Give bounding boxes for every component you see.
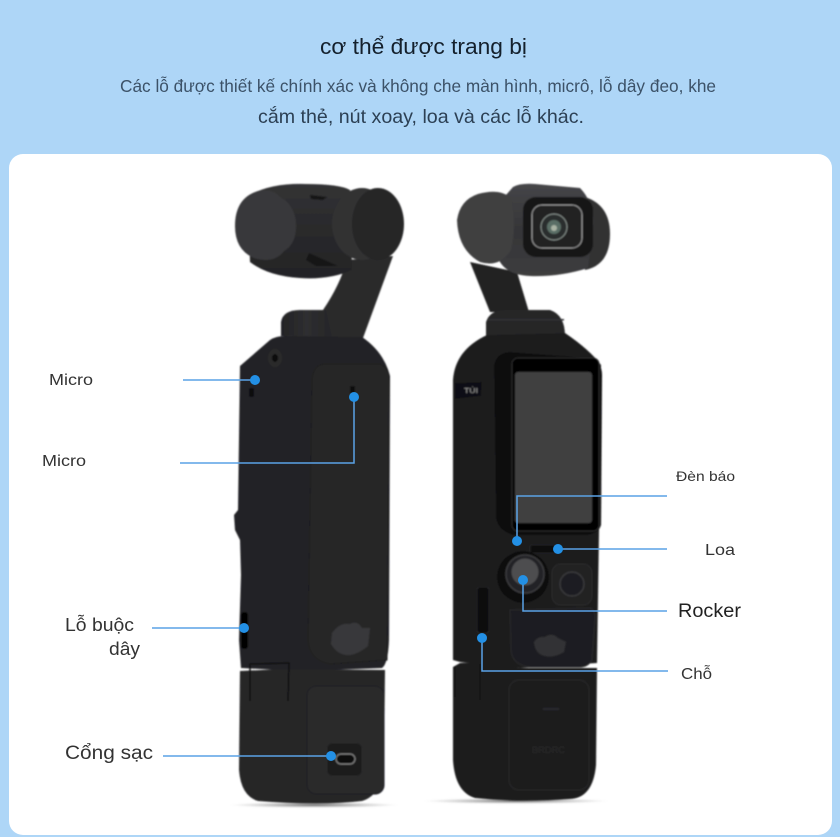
gimbal arm: [323, 256, 393, 338]
label: Micro: [42, 453, 86, 470]
description line 2: cắm thẻ, nút xoay, loa và các lỗ khác.: [258, 105, 584, 128]
lens black panel: [523, 197, 593, 257]
speaker grille: [530, 545, 558, 553]
right motor housing: [332, 188, 392, 260]
lens highlight: [551, 225, 557, 231]
case body upper: [234, 336, 390, 671]
leader line: [152, 627, 244, 629]
dot: [553, 544, 563, 554]
microphone slot back: [350, 386, 355, 393]
callout: Micro back: [42, 392, 359, 470]
callout: indicator light: [512, 468, 735, 546]
label line 2: dây: [109, 639, 140, 659]
card slot: [477, 587, 489, 633]
leader line: [183, 379, 255, 381]
dot: [326, 751, 336, 761]
leader line: [523, 580, 667, 611]
lens housing: [498, 184, 594, 276]
callout: rocker: [518, 575, 742, 622]
label: Micro: [49, 372, 93, 389]
port panel: [307, 686, 384, 794]
leader line: [163, 755, 331, 757]
lens cap: [235, 190, 296, 260]
label: Cổng sạc: [65, 743, 153, 764]
callout: speaker: [553, 542, 735, 559]
pocket tag: [455, 382, 482, 399]
strap hole: [272, 354, 278, 362]
ground shadow: [424, 798, 608, 804]
lower case flap seam: [455, 664, 480, 700]
dot: [477, 633, 487, 643]
embossed logo: [534, 635, 566, 656]
product photo: front side of camera: [424, 184, 610, 804]
label: Rocker: [678, 601, 742, 622]
lower hinge: [250, 663, 289, 701]
button panel: [552, 564, 592, 605]
screen frame: [494, 352, 602, 535]
gimbal arm: [470, 262, 529, 312]
dot: [518, 575, 528, 585]
USB-C textured surround: [327, 743, 362, 776]
gimbal neck: [281, 310, 332, 338]
pocket tag text: TÚI: [464, 386, 478, 395]
right motor: [585, 197, 610, 270]
title: cơ thể được trang bị: [320, 34, 527, 59]
leader line: [517, 496, 667, 541]
case body upper: [453, 333, 601, 668]
strap anchor: [268, 349, 282, 367]
callout: lanyard hole: [65, 614, 249, 659]
callout: card slot: [477, 633, 712, 683]
neck highlight: [488, 319, 564, 320]
back panel outline: [308, 364, 389, 664]
label line 1: Lỗ buộc: [65, 614, 134, 635]
camera barrel: [248, 184, 352, 278]
ground shadow: [230, 802, 398, 808]
leader line: [558, 548, 667, 550]
memory bay panel: [509, 680, 589, 790]
leader line: [180, 397, 354, 463]
label: Đèn báo: [676, 468, 735, 484]
joystick ring: [506, 555, 544, 593]
logo panel: [510, 608, 595, 667]
embossed brand: BRDRC: [532, 745, 566, 755]
product photo: back side of camera: [230, 184, 404, 808]
record button: [560, 572, 584, 596]
callout: charging port: [65, 743, 336, 764]
label: Loa: [705, 542, 735, 559]
lens outer ring: [541, 214, 567, 240]
description line 1: Các lỗ được thiết kế chính xác và không che màn hình, micrô, lỗ dây đeo, khe: [120, 75, 716, 96]
screen glass: [512, 358, 599, 531]
right motor cap: [352, 188, 404, 260]
dot: [512, 536, 522, 546]
gimbal neck: [486, 310, 565, 336]
dot: [250, 375, 260, 385]
heading block: [120, 34, 716, 128]
embossed mark: [543, 708, 559, 710]
embossed logo: [331, 623, 370, 655]
leader line: [482, 638, 668, 671]
dot: [239, 623, 249, 633]
lanyard slot: [241, 612, 248, 649]
screen display: [515, 372, 592, 523]
USB-C port: [336, 754, 355, 764]
joystick top: [512, 558, 538, 586]
joystick surround: [497, 551, 549, 603]
case body lower: [239, 669, 385, 804]
dot: [349, 392, 359, 402]
lens glass frame: [532, 205, 582, 248]
callout: Micro top left: [49, 372, 260, 389]
label: Chỗ: [681, 664, 712, 683]
lens glass: [547, 220, 561, 234]
barrel vents: [306, 195, 338, 266]
microphone slot left: [249, 388, 254, 397]
lens cap side: [457, 192, 514, 264]
case body lower: [453, 662, 597, 801]
white product panel: [9, 154, 832, 835]
